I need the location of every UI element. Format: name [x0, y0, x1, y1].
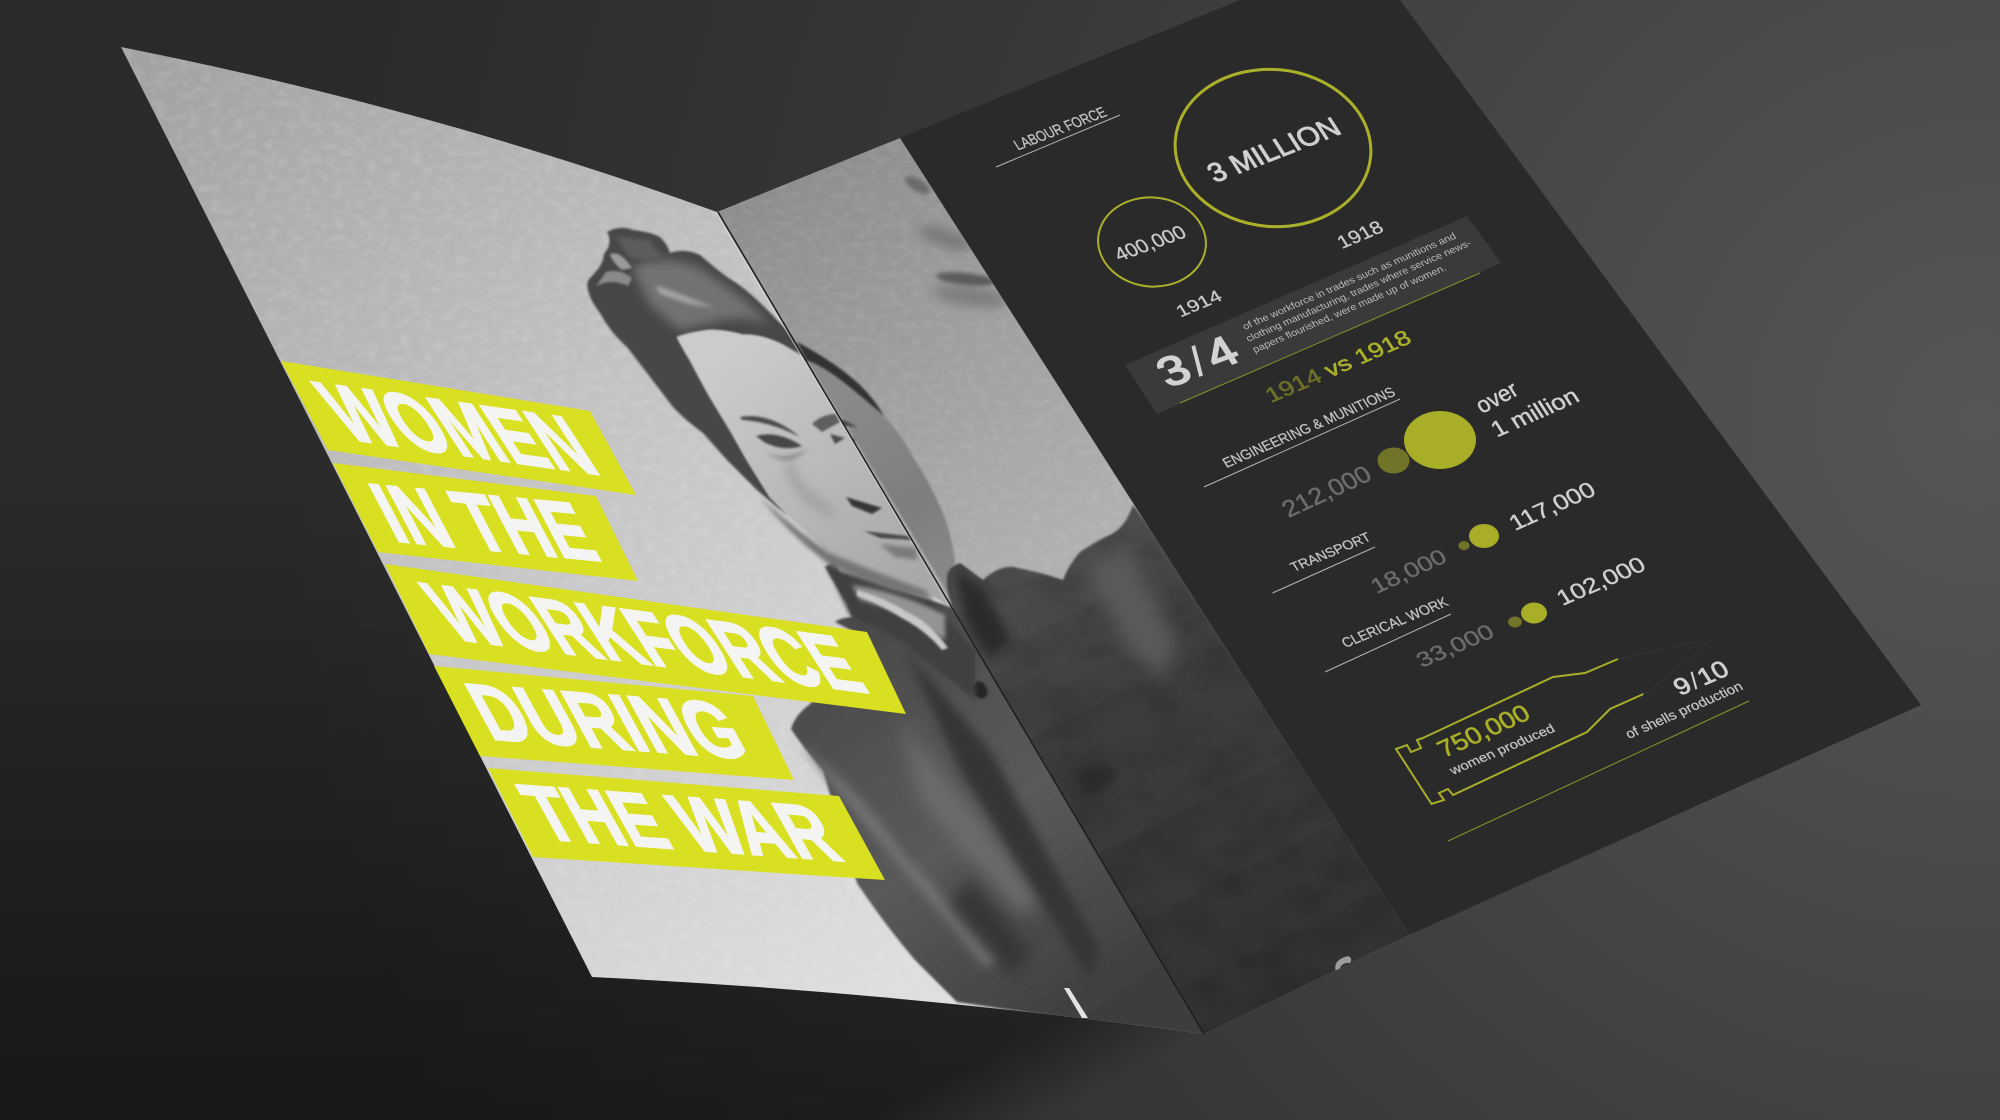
value: 33,000: 33,000 — [1411, 620, 1499, 672]
section: labour force — [996, 61, 1387, 321]
heading: labour force: LABOUR FORCE — [1010, 104, 1110, 153]
caption: women produced: women produced — [1447, 721, 1558, 777]
label: 1914: 1914 — [1172, 286, 1226, 321]
value: 212,000: 212,000 — [1277, 460, 1376, 523]
photo: collar and neck — [827, 567, 975, 700]
value: over 1 million: 1 million — [1486, 383, 1584, 442]
banner: women: WOMEN — [300, 364, 615, 493]
photo: hair — [587, 228, 815, 517]
photo: jacket on right panel — [946, 504, 1409, 1034]
text: of shells production — [1622, 679, 1746, 742]
callout: three quarters — [1125, 216, 1501, 414]
row: engineering and munitions — [1204, 376, 1584, 523]
value: over 1 million: over — [1471, 376, 1523, 418]
label: TRANSPORT — [1287, 530, 1374, 575]
photo: face — [677, 330, 950, 607]
panel: left cover page — [100, 30, 1220, 1050]
paragraph — [1240, 231, 1473, 355]
photo: side of face beyond the fold — [796, 341, 956, 592]
photo: jacket on left page — [791, 563, 1210, 1040]
label: CLERICAL WORK — [1338, 594, 1451, 651]
value: 9/10: 9/10 — [1668, 655, 1734, 701]
circle: 400,000: 400,000 — [1110, 221, 1190, 265]
banner: during: DURING — [452, 667, 763, 777]
banner: the war: THE WAR — [506, 768, 855, 878]
value: 117,000: 117,000 — [1504, 477, 1600, 535]
bubble: 1918 — [1521, 602, 1547, 624]
value: over 1 million — [1471, 376, 1584, 442]
row: transport — [1272, 477, 1600, 598]
photo: white speck near the page foot — [1335, 956, 1351, 972]
banner: in the — [333, 463, 638, 581]
heading: 1914 vs 1918: 1914 vs 1918 — [1260, 326, 1416, 407]
circle: 3 million: 3 MILLION — [1201, 112, 1346, 188]
circle: 400,000 — [1094, 193, 1210, 291]
bubble: 1914 — [1378, 448, 1410, 474]
panel: dark infographic page — [717, 0, 1921, 1034]
banner: workforce: WORKFORCE — [407, 566, 883, 711]
bubble: 1914 — [1508, 616, 1522, 628]
section: shell production — [1396, 641, 1749, 841]
text: ENGINEERING & MUNITIONS — [1219, 384, 1398, 471]
row: clerical work — [1325, 552, 1650, 672]
panel: middle photo page — [717, 138, 1409, 1034]
headline banners — [281, 361, 906, 880]
value: 102,000: 102,000 — [1552, 552, 1650, 610]
fold line — [716, 212, 1204, 1034]
banner: in the: IN THE — [356, 466, 613, 579]
circle: 3 million — [1169, 61, 1377, 235]
label: 1918: 1918 — [1333, 217, 1387, 252]
figure: 3/4: 3/4 — [1147, 327, 1248, 396]
bubble: 1918 — [1469, 524, 1499, 548]
bubble: 1914 — [1458, 541, 1470, 550]
value: 18,000: 18,000 — [1366, 545, 1451, 598]
icon: artillery shell outline — [1396, 641, 1706, 804]
bubble: 1918 — [1404, 411, 1476, 469]
banner: workforce — [385, 564, 906, 714]
value: 750,000: 750,000 — [1432, 699, 1535, 763]
